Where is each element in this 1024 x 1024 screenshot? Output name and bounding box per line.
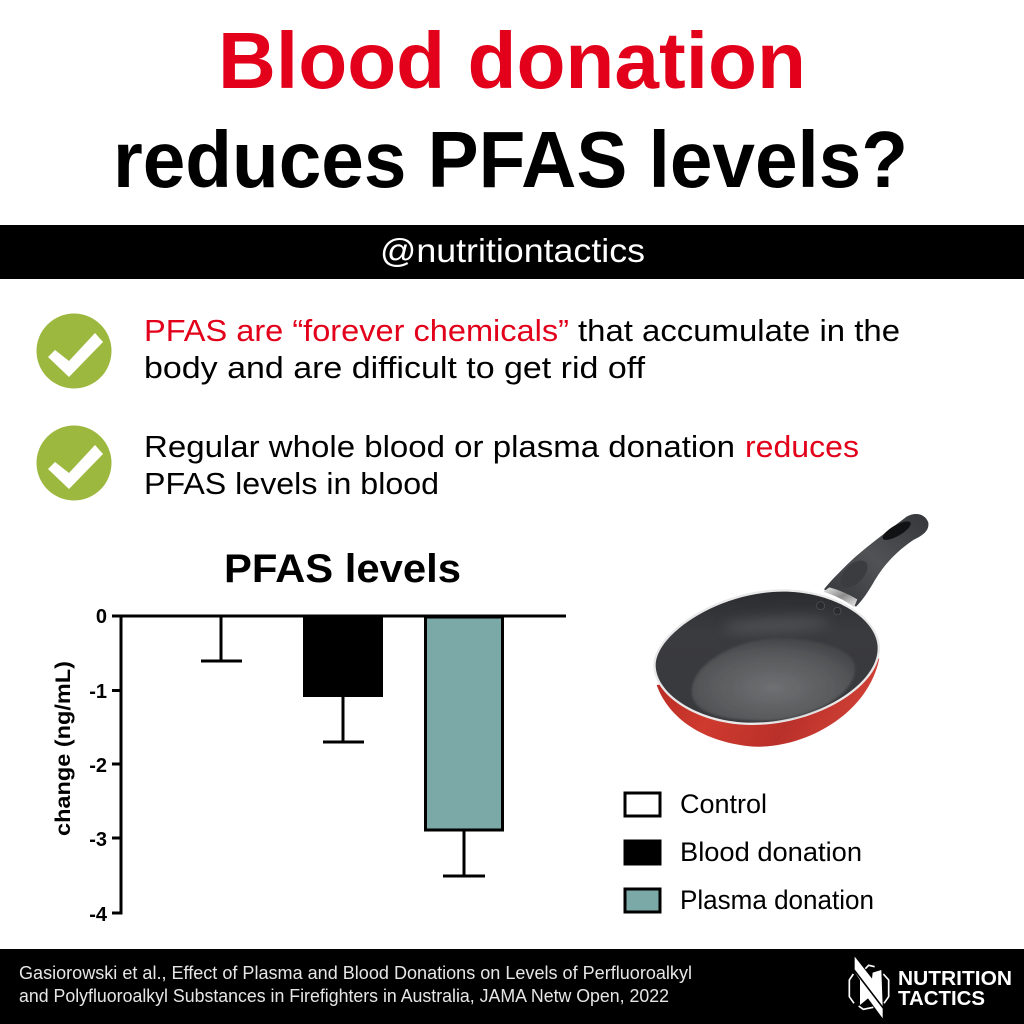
citation: and Polyfluoroalkyl Substances in Firefighters in Australia, JAMA Netw Open, 2022 [19,986,669,1006]
key point 1 [36,313,900,388]
bar chart [52,606,566,926]
citation: Gasiorowski et al., Effect of Plasma and Blood Donations on Levels of Perfluoroalkyl [19,963,692,983]
footer [0,949,1024,1024]
y axis tick labels [89,606,108,926]
title: reduces PFAS levels? [113,115,908,204]
title: Blood donation [218,16,806,105]
pan handle [823,514,928,607]
pan floor [692,638,855,721]
legend: blood donation: Blood donation [680,837,862,867]
text: donation reduces levels: Regular whole blood or plasma donation [144,429,735,464]
icon: green check 1 [36,314,112,388]
bar: plasma donation [426,617,502,876]
logo: nutrition tactics [849,957,1012,1018]
legend: plasma donation: Plasma donation [680,885,874,915]
key point 2 [36,426,859,501]
legend: control [625,789,767,819]
y axis title: change (ng/mL) [52,661,75,836]
pan interior [656,592,878,723]
y axis tick labels: 0 [96,606,107,628]
logo wordmark [898,968,1012,1010]
title [113,16,908,204]
chart heading: PFAS levels [224,547,461,591]
y axis tick labels: -3 [89,829,107,851]
bar: control [201,616,242,661]
logo wordmark: TACTICS [898,988,985,1010]
text: donation reduces levels [144,429,859,501]
y axis [112,615,566,914]
text: forever chemicals: body and are difficult to get rid off [144,350,645,385]
legend [625,789,874,915]
handle banner [0,225,1024,279]
text: forever chemicals: that accumulate in the [578,313,900,348]
pan red body [657,658,879,747]
icon: green check 2 [36,426,112,500]
handle banner: @nutritiontactics [380,232,645,269]
logo mark [849,957,889,1018]
text: donation reduces levels: PFAS levels in blood [144,466,439,501]
text: forever chemicals [144,313,900,385]
y axis tick labels: -4 [89,904,108,926]
y axis tick labels: -1 [89,681,107,703]
text: forever chemicals: PFAS are “forever chemicals” [144,313,569,348]
citation [19,963,692,1006]
y axis tick labels: -2 [89,755,107,777]
text: donation reduces levels: reduces [745,429,859,464]
icon: frying pan [653,514,928,747]
bar: blood donation [303,616,383,742]
pan rim [653,589,880,725]
legend: control: Control [680,789,767,819]
pan wall highlight [723,615,830,635]
pan rivets [817,602,841,615]
logo wordmark: NUTRITION [898,968,1012,990]
